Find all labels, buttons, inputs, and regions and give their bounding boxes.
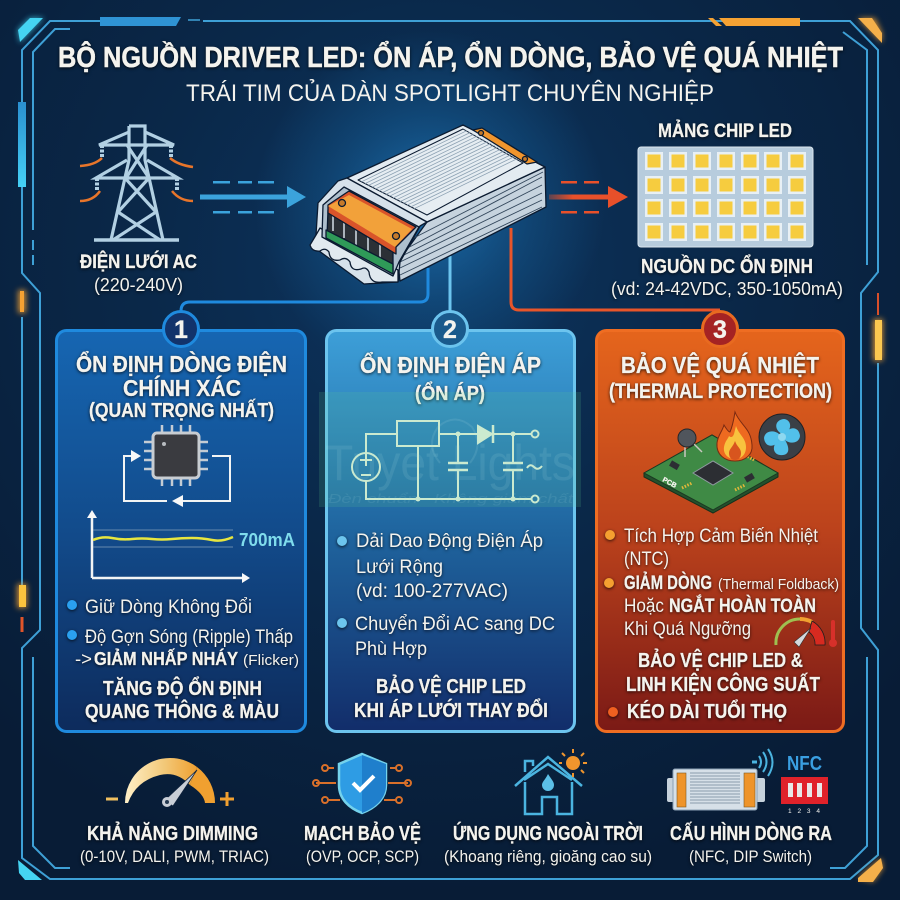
green PCB strip — [326, 230, 393, 274]
badge 2 — [432, 312, 468, 346]
glow behind driver — [255, 30, 605, 380]
panel 1 heading: (QUAN TRỌNG NHẤT) — [89, 399, 274, 422]
label: AC grid: (220-240V) — [94, 275, 183, 295]
panel 3 bullet list: (Thermal Foldback) — [718, 576, 839, 593]
icon: dimming gauge — [106, 758, 234, 807]
outdoor label: ỨNG DỤNG NGOÀI TRỜI — [453, 821, 643, 845]
panel 2 conclusion: BẢO VỆ CHIP LED — [376, 674, 526, 698]
label: stable DC source — [611, 254, 843, 299]
chart: regulator circuit diagram — [352, 421, 542, 502]
icon: LED chip array — [638, 147, 813, 247]
dimming label: (0-10V, DALI, PWM, TRIAC) — [80, 847, 269, 866]
panel 3 bullet list: NGẮT HOÀN TOÀN — [669, 595, 816, 617]
icon: PCB with thermistor, flame and fan — [644, 412, 805, 513]
panel 2 bullet list — [337, 529, 555, 660]
dimming label: KHẢ NĂNG DIMMING — [87, 822, 258, 845]
panel 2 heading: (ỔN ÁP) — [415, 381, 485, 405]
terminal cavity — [322, 187, 419, 276]
panel 3 bullet list: (NTC) — [624, 549, 669, 570]
panel 1 conclusion: TĂNG ĐỘ ỔN ĐỊNH — [103, 676, 262, 700]
badge 3: 3 — [713, 316, 727, 344]
panel 3: thermal protection — [596, 312, 844, 732]
panel 1 conclusion: QUANG THÔNG & MÀU — [85, 699, 279, 723]
panel 3 heading — [609, 350, 832, 403]
configuration label: (NFC, DIP Switch) — [689, 847, 812, 866]
protection label: MẠCH BẢO VỆ — [304, 821, 421, 845]
outdoor label — [444, 821, 652, 866]
panel 3 conclusion — [608, 648, 820, 723]
panel 3 bullet list: Tích Hợp Cảm Biến Nhiệt — [624, 526, 819, 547]
panel 2 conclusion — [354, 674, 548, 722]
subtitle: TRÁI TIM CỦA DÀN SPOTLIGHT CHUYÊN NGHIỆP — [186, 78, 714, 107]
arrow: driver output — [549, 181, 628, 214]
icon: house, drop and sun — [515, 749, 587, 814]
top face — [347, 125, 545, 222]
panel 2 heading — [360, 351, 541, 405]
icon: LED driver unit — [310, 125, 546, 284]
badge 1: 1 — [174, 316, 188, 344]
panel 1 heading — [76, 350, 287, 422]
back terminal cover — [473, 128, 537, 164]
watermark: Đèn chuẩn - Không giảm chất — [328, 491, 575, 506]
front frame — [311, 178, 427, 284]
badge 3 — [702, 312, 738, 346]
panel 3 bullet list: Khi Quá Ngưỡng — [624, 619, 751, 640]
panel 2 bullet list: (vd: 100-277VAC) — [356, 580, 508, 602]
chart: stable current line: 700mA — [239, 530, 295, 550]
panel 2 conclusion: KHI ÁP LƯỚI THAY ĐỔI — [354, 698, 548, 722]
label: stable DC source: (vd: 24-42VDC, 350-1050mA) — [611, 279, 843, 299]
badge 1 — [164, 312, 198, 346]
dimming label — [80, 822, 269, 866]
mounting flange — [310, 228, 398, 282]
icon: driver with NFC and DIP switch — [667, 749, 828, 815]
right side face — [398, 167, 546, 281]
arrow: AC into driver — [200, 181, 306, 214]
configuration label — [670, 821, 832, 866]
panel 3 heading: BẢO VỆ QUÁ NHIỆT — [621, 350, 819, 378]
connector lines from driver to panels — [181, 228, 720, 312]
outdoor label: (Khoang riêng, gioăng cao su) — [444, 847, 652, 866]
panel 3 conclusion: BẢO VỆ CHIP LED & — [638, 648, 803, 672]
icon: temperature gauge and thermometer — [776, 619, 837, 647]
feature: outdoor use — [444, 749, 652, 866]
panel 1 conclusion — [85, 676, 279, 723]
panel 2 bullet list: Phù Hợp — [355, 638, 427, 660]
panel 1: current regulation — [56, 312, 306, 732]
icon: driver with NFC and DIP switch: 1 2 3 4 — [788, 808, 820, 815]
side ribs — [400, 172, 543, 275]
label: LED chip array: MẢNG CHIP LED — [658, 120, 792, 142]
panel 1 bullet list — [67, 597, 299, 669]
panel 1 bullet list: -> — [75, 649, 92, 669]
configuration label: CẤU HÌNH DÒNG RA — [670, 821, 832, 845]
badge 2: 2 — [443, 316, 457, 344]
protection label: (OVP, OCP, SCP) — [306, 847, 419, 866]
label: stable DC source: NGUỒN DC ỔN ĐỊNH — [641, 254, 813, 278]
panel 3 bullet list: GIẢM DÒNG — [624, 572, 712, 594]
panel 2 heading: ỔN ĐỊNH ĐIỆN ÁP — [360, 351, 541, 378]
watermark — [319, 392, 581, 507]
label: AC grid: ĐIỆN LƯỚI AC — [80, 251, 197, 273]
watermark: Tuyet Lights — [325, 435, 575, 491]
panel 3 bullet list: Hoặc — [624, 596, 664, 617]
panel 1 heading: CHÍNH XÁC — [123, 374, 241, 401]
feature: protection circuits — [304, 754, 421, 866]
chart: stable current line — [87, 510, 295, 583]
label: AC grid — [80, 251, 197, 295]
icon: control chip with feedback loop — [124, 425, 230, 507]
panel 2: voltage regulation — [326, 312, 574, 732]
icon: power tower (AC grid) — [80, 126, 193, 240]
panel 1 heading: ỔN ĐỊNH DÒNG ĐIỆN — [76, 350, 287, 377]
feature: output configuration — [667, 749, 832, 866]
icon: PCB with thermistor, flame and fan: PCB — [661, 477, 677, 490]
panel 1 bullet list: Độ Gợn Sóng (Ripple) Thấp — [85, 627, 293, 648]
protection label — [304, 821, 421, 866]
panel 3 heading: (THERMAL PROTECTION) — [609, 380, 832, 403]
icon: driver with NFC and DIP switch: NFC — [787, 753, 822, 775]
panel 2 bullet list: Chuyển Đổi AC sang DC — [355, 613, 555, 635]
panel 3 bullet list — [604, 526, 839, 640]
panel 3 conclusion: LINH KIỆN CÔNG SUẤT — [626, 672, 820, 696]
panel 1 bullet list: Giữ Dòng Không Đổi — [85, 597, 252, 618]
panel 2 bullet list: Dải Dao Động Điện Áp — [356, 529, 543, 552]
orange cover — [328, 191, 416, 254]
panel 2 bullet list: Lưới Rộng — [356, 556, 443, 578]
panel 1 bullet list: (Flicker) — [243, 652, 299, 669]
feature: dimming — [80, 758, 269, 866]
panel 1 bullet list: GIẢM NHẤP NHÁY — [94, 648, 239, 669]
icon: shield with traces — [313, 754, 411, 813]
panel 3 conclusion: KÉO DÀI TUỔI THỌ — [627, 699, 787, 723]
